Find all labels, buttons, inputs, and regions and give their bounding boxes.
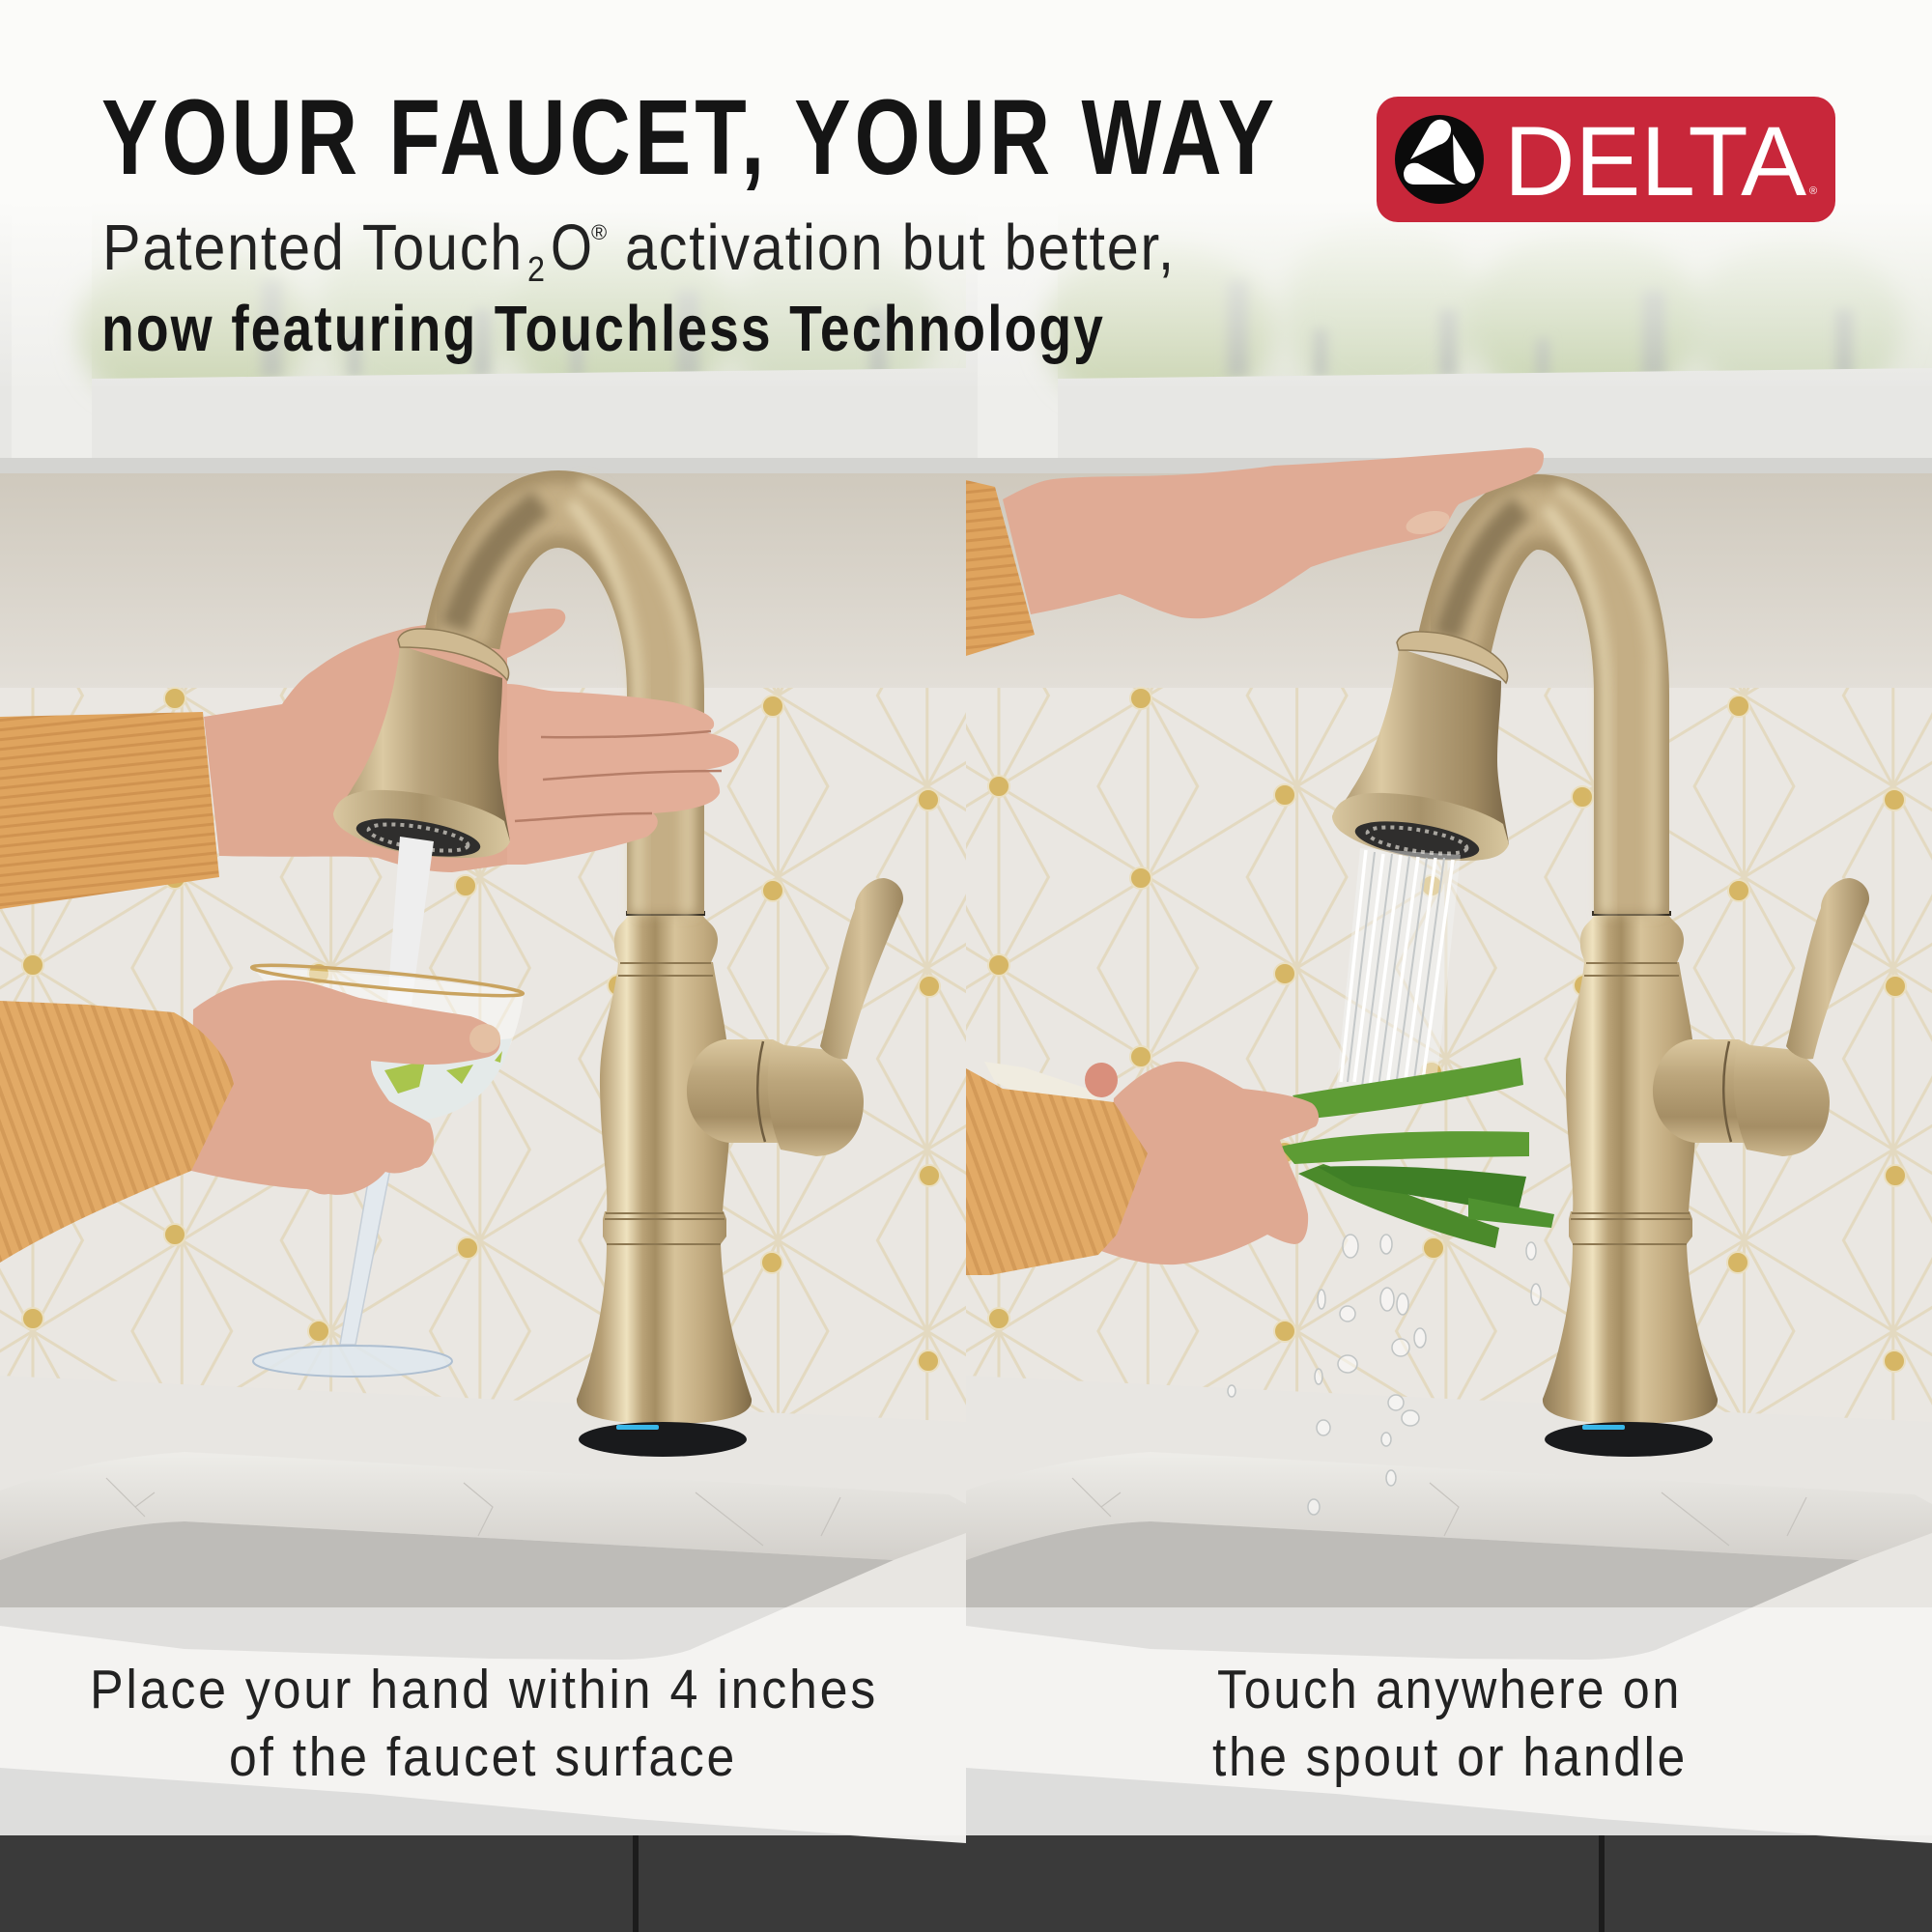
subtitle line 1: Patented Touch (102, 212, 524, 284)
caption right: the spout or handle (1212, 1726, 1688, 1788)
thumbnail (1404, 507, 1452, 538)
green onions (1280, 1058, 1554, 1248)
glass foot (253, 1346, 452, 1377)
stone veins (106, 1478, 840, 1546)
glass water (367, 1038, 512, 1122)
right spray head (1332, 632, 1509, 867)
faucet body, right (1543, 878, 1869, 1457)
lower ring (603, 1211, 726, 1244)
kitchen background, left panel (0, 0, 966, 1932)
right spout gooseneck (1446, 488, 1654, 914)
collar (614, 916, 718, 963)
logo wordmark: DELTA (1504, 106, 1806, 216)
counter corner (850, 1835, 966, 1843)
subtitle line 1 (102, 212, 1176, 289)
caption right: Touch anywhere on (1217, 1659, 1682, 1720)
gold tile dots (22, 688, 940, 1372)
fingernail (469, 1024, 500, 1053)
subtitle line 2: now featuring Touchless Technology (101, 293, 1105, 365)
vase body (600, 962, 730, 1213)
subtitle line 1: ® (591, 220, 607, 244)
left scene (0, 483, 739, 1377)
fingers in front of the spout (507, 684, 739, 865)
aerator (354, 811, 483, 864)
handle hub (687, 1039, 779, 1143)
rim (333, 790, 510, 858)
sweater sleeve, upper arm (0, 712, 219, 909)
caption right (1212, 1659, 1688, 1788)
countertop (0, 1376, 966, 1843)
cabinet gap (633, 1835, 639, 1932)
gold glass rim (251, 960, 524, 1001)
subtitle line 1: 2 (527, 249, 545, 289)
left spout gooseneck (454, 483, 688, 914)
right scene (966, 447, 1654, 1515)
subtitle line 1: O (551, 212, 592, 284)
handle knob (768, 1039, 864, 1156)
collar ring (398, 629, 509, 680)
collar and ring lines (605, 963, 724, 1244)
caption left: Place your hand within 4 inches (90, 1659, 878, 1720)
cabinet (0, 1835, 966, 1932)
glass stem (340, 1159, 391, 1345)
finger separations (515, 731, 722, 821)
flared base (577, 1243, 752, 1424)
black touch base (579, 1422, 747, 1457)
logo emblem (1395, 115, 1484, 204)
cabinet front under counter (0, 1768, 966, 1843)
upper wall (0, 473, 966, 690)
mosaic tile backsplash (0, 688, 966, 1422)
bell (333, 645, 510, 841)
logo background (1377, 97, 1835, 222)
sink rim (0, 1452, 966, 1560)
upper sleeve (966, 480, 1035, 656)
glass bowl (252, 967, 524, 1122)
registered mark: ® (1809, 185, 1817, 197)
window view of blurred trees (77, 193, 966, 415)
caption left (90, 1659, 878, 1788)
neck seam (626, 911, 705, 916)
top fade (0, 0, 966, 386)
subtitle line 1: activation but better, (625, 212, 1176, 284)
fingertip behind (1085, 1063, 1118, 1097)
title: YOUR FAUCET, YOUR WAY (101, 78, 1278, 197)
lower right sleeve (966, 1068, 1148, 1275)
handle seam (757, 1041, 765, 1142)
falling water droplets (1228, 1235, 1541, 1515)
water stream (387, 837, 434, 1005)
kitchen background, right panel (966, 0, 1932, 1932)
herbs (384, 1051, 502, 1094)
Delta logo (1377, 97, 1835, 222)
blue LED (616, 1425, 659, 1430)
caption band left and right (0, 1607, 1932, 1835)
hand touching spout (1003, 447, 1544, 618)
sink basin (0, 1521, 894, 1660)
spray head (333, 629, 510, 864)
hand holding onions (1101, 1062, 1319, 1264)
window frame (0, 193, 966, 473)
spray of water (1336, 848, 1461, 1092)
shelf ledge (0, 458, 966, 474)
lower sweater sleeve (0, 1001, 234, 1263)
window sill (0, 193, 966, 464)
caption left: of the faucet surface (229, 1726, 737, 1788)
handle lever (820, 878, 903, 1059)
faucet body, left (577, 878, 903, 1457)
lower hand (191, 980, 500, 1195)
onion roots (984, 1062, 1108, 1111)
aerator nozzles (367, 819, 469, 856)
open hand (204, 609, 565, 872)
